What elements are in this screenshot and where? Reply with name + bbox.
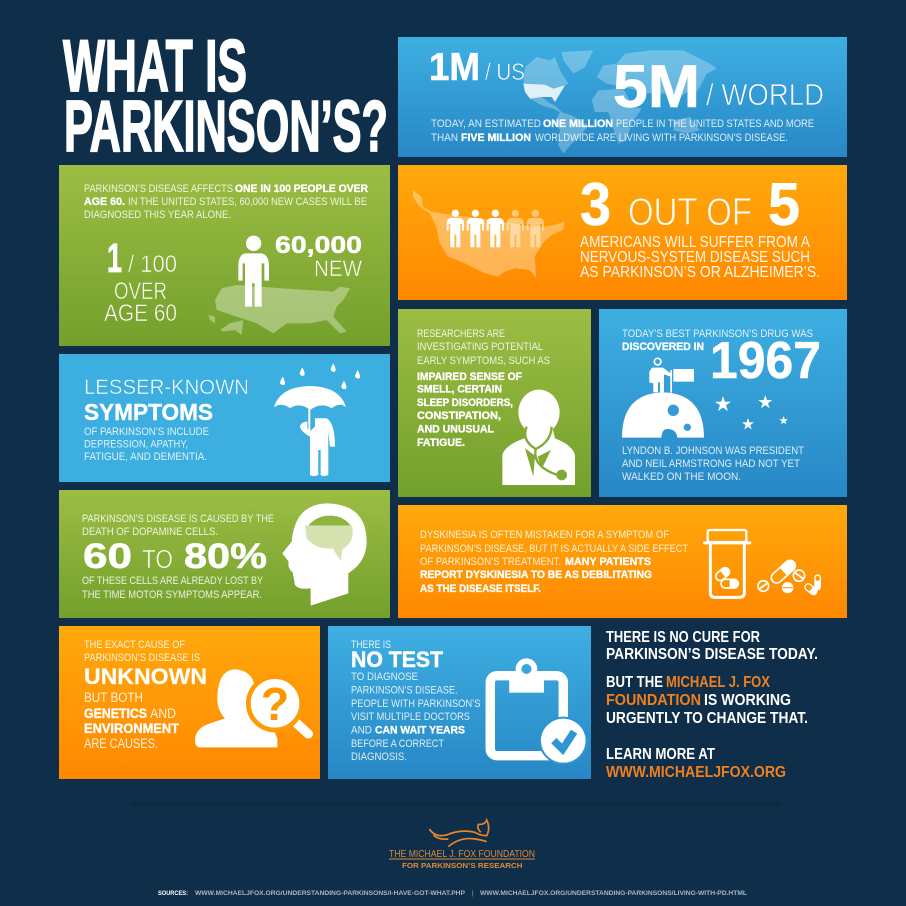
icon: US map with five people (413, 190, 565, 278)
icon: person on US map (208, 236, 350, 335)
stat: 60 to 80% (83, 537, 267, 576)
call to action: FOUNDATION (606, 692, 701, 709)
call to action: IS WORKING (704, 692, 791, 709)
description: ONE IN 100 PEOPLE OVER (235, 183, 368, 195)
heading: 3 out of 5: 5 (768, 171, 800, 238)
stat: 1 in 100: 1 (107, 235, 122, 281)
description: EARLY SYMPTOMS, SUCH AS (417, 355, 550, 367)
stat: 1 in 100: OVER (114, 278, 167, 305)
description: WALKED ON THE MOON. (622, 471, 741, 483)
description: THAN (431, 132, 458, 144)
call to action: MICHAEL J. FOX (666, 674, 771, 691)
description: PEOPLE IN THE UNITED STATES AND MORE (616, 118, 814, 130)
symptom list: SMELL, CERTAIN (417, 384, 502, 396)
description (84, 183, 368, 221)
heading (84, 375, 249, 425)
description: AND (150, 706, 176, 721)
symptom list (417, 371, 522, 449)
description (84, 639, 207, 751)
stat: 60,000 new (275, 232, 362, 281)
stat: 1M US (429, 46, 525, 89)
description (580, 234, 820, 281)
description: DISCOVERED IN (622, 341, 704, 353)
description: UNKNOWN (84, 664, 207, 689)
description: ARE CAUSES. (84, 736, 158, 751)
description (351, 639, 481, 763)
description: DIAGNOSED THIS YEAR ALONE. (84, 209, 231, 221)
description: AS PARKINSON’S OR ALZHEIMER’S. (580, 264, 820, 281)
description: CAN WAIT YEARS (375, 724, 465, 736)
description (420, 529, 688, 595)
panel: three out of five (398, 165, 847, 300)
description: INVESTIGATING POTENTIAL (417, 341, 543, 353)
description: OF PARKINSON’S TREATMENT. (420, 556, 561, 568)
stat: 1M US: / US (485, 59, 525, 86)
description: OF PARKINSON’S INCLUDE (84, 426, 209, 438)
sources: WWW.MICHAELJFOX.ORG/UNDERSTANDING-PARKINSONS/LIVING-WITH-PD.HTML (480, 890, 747, 897)
description: PARKINSON’S DISEASE. (351, 684, 458, 696)
stat: 1 in 100: / 100 (128, 251, 177, 278)
title: PARKINSON’S? (64, 87, 388, 167)
description: PARKINSON’S DISEASE AFFECTS (84, 183, 233, 195)
description: DYSKINESIA IS OFTEN MISTAKEN FOR A SYMPTOM OF (420, 529, 669, 541)
title: WHAT IS (63, 26, 247, 107)
description: GENETICS (84, 706, 147, 721)
panel: best drug discovered in 1967 (599, 309, 847, 497)
description: DEPRESSION, APATHY, (84, 438, 188, 450)
panel: early symptoms (398, 309, 591, 497)
description (431, 118, 814, 144)
description: PARKINSON’S DISEASE IS CAUSED BY THE (82, 513, 274, 525)
icon: clipboard with check mark (490, 658, 587, 764)
panel: dopamine cells (59, 490, 390, 618)
description (622, 328, 813, 353)
panel: unknown cause (59, 626, 320, 779)
panel: one in 100 over age 60 (59, 165, 390, 346)
description: PARKINSON’S DISEASE, BUT IT IS ACTUALLY A SIDE EFFECT (420, 543, 688, 555)
description: WORLDWIDE ARE LIVING WITH PARKINSON’S DISEASE. (535, 132, 788, 144)
description: IN THE UNITED STATES, 60,000 NEW CASES WILL BE (128, 196, 367, 208)
call to action: PARKINSON’S DISEASE TODAY. (606, 646, 818, 663)
description: AMERICANS WILL SUFFER FROM A (580, 234, 811, 251)
description: THE TIME MOTOR SYMPTOMS APPEAR. (82, 589, 262, 601)
sources: | (472, 890, 474, 897)
symptom list: AND UNUSUAL (417, 424, 494, 436)
description: AS THE DISEASE ITSELF. (420, 583, 541, 595)
footer logo: The Michael J. Fox Foundation: THE MICHAEL J. FOX FOUNDATION (389, 849, 535, 860)
description: FIVE MILLION (461, 132, 531, 144)
call to action: THERE IS NO CURE FOR (606, 629, 760, 646)
description: DIAGNOSIS. (351, 751, 407, 763)
stat: 1967: 1967 (710, 332, 821, 390)
description: LYNDON B. JOHNSON WAS PRESIDENT (622, 445, 804, 457)
description (417, 328, 550, 367)
call to action (606, 629, 818, 781)
description: AND NEIL ARMSTRONG HAD NOT YET (622, 458, 800, 470)
panel: one million US, five million world (398, 37, 847, 157)
symptom list: CONSTIPATION, (417, 410, 501, 422)
sources (158, 890, 747, 897)
icon: astronaut on moon with stars (622, 358, 788, 438)
description: AGE 60. (84, 196, 125, 208)
description: NERVOUS-SYSTEM DISEASE SUCH (580, 249, 810, 266)
stat: 1 in 100: AGE 60 (104, 300, 177, 327)
description: FATIGUE, AND DEMENTIA. (84, 451, 207, 463)
panel: no test (328, 626, 591, 779)
sources: WWW.MICHAELJFOX.ORG/UNDERSTANDING-PARKINSONS/I-HAVE-GOT-WHAT.PHP (195, 890, 465, 897)
description: MANY PATIENTS (565, 556, 651, 568)
description: ENVIRONMENT (84, 721, 180, 736)
description: NO TEST (351, 647, 444, 672)
description (84, 426, 209, 463)
stat: 60 to 80%: 60 (83, 537, 132, 576)
description (82, 575, 263, 601)
symptom list: IMPAIRED SENSE OF (417, 371, 522, 383)
description: TODAY’S BEST PARKINSON’S DRUG WAS (622, 328, 813, 340)
call to action: URGENTLY TO CHANGE THAT. (606, 710, 808, 727)
description: THE EXACT CAUSE OF (84, 639, 185, 651)
stat: 60,000 new: 60,000 (275, 232, 362, 259)
panel: dyskinesia (398, 505, 847, 618)
stat: 1M US: 1M (429, 46, 480, 89)
stat: 5M world: 5M (613, 53, 700, 120)
stat: 5M world: / WORLD (706, 77, 824, 112)
description: PARKINSON’S DISEASE IS (84, 652, 200, 664)
sources: SOURCES: (158, 890, 188, 897)
call to action: LEARN MORE AT (606, 746, 715, 763)
heading: SYMPTOMS (84, 399, 213, 425)
description: TODAY, AN ESTIMATED (431, 118, 541, 130)
description: THERE IS (351, 639, 391, 651)
description: REPORT DYSKINESIA TO BE AS DEBILITATING (420, 569, 652, 581)
symptom list: FATIGUE. (417, 437, 465, 449)
stat: 5M world (613, 53, 824, 120)
call to action: BUT THE (606, 674, 663, 691)
description: ONE MILLION (543, 118, 613, 130)
heading: LESSER-KNOWN (84, 375, 249, 399)
description: DEATH OF DOPAMINE CELLS. (82, 526, 218, 538)
footer logo: The Michael J. Fox Foundation (389, 820, 535, 870)
stat: 1 in 100 (104, 235, 177, 327)
heading: 3 out of 5 (580, 171, 800, 238)
description: RESEARCHERS ARE (417, 328, 505, 340)
panel: lesser-known symptoms (59, 354, 390, 482)
title (63, 26, 388, 167)
description: AND (351, 724, 372, 736)
description: VISIT MULTIPLE DOCTORS (351, 711, 470, 723)
icon: doctor with stethoscope (502, 390, 575, 485)
icon: profile and magnifying glass: ? (261, 678, 289, 730)
description: OF THESE CELLS ARE ALREADY LOST BY (82, 575, 263, 587)
icon: profile and magnifying glass (195, 669, 308, 747)
symptom list: SLEEP DISORDERS, (417, 397, 513, 409)
heading: 3 out of 5: 3 (580, 171, 611, 238)
description: TO DIAGNOSE (351, 671, 418, 683)
icon: person under umbrella in rain (274, 363, 360, 476)
description: PEOPLE WITH PARKINSON’S (351, 698, 481, 710)
description (82, 513, 274, 538)
icon: pill bottle and pills (703, 530, 821, 597)
footer logo: The Michael J. Fox Foundation: FOR PARKINSON’S RESEARCH (402, 861, 522, 870)
description: BEFORE A CORRECT (351, 738, 444, 750)
stat: 60,000 new: NEW (314, 256, 362, 281)
stat: 60 to 80%: TO (142, 544, 173, 574)
world map (523, 50, 717, 154)
description: BUT BOTH (84, 690, 143, 705)
heading: 3 out of 5: OUT OF (628, 191, 752, 234)
description (622, 445, 804, 483)
stat: 60 to 80%: 80% (184, 537, 267, 576)
icon: head with brain (282, 503, 367, 606)
call to action: WWW.MICHAELJFOX.ORG (606, 764, 786, 781)
